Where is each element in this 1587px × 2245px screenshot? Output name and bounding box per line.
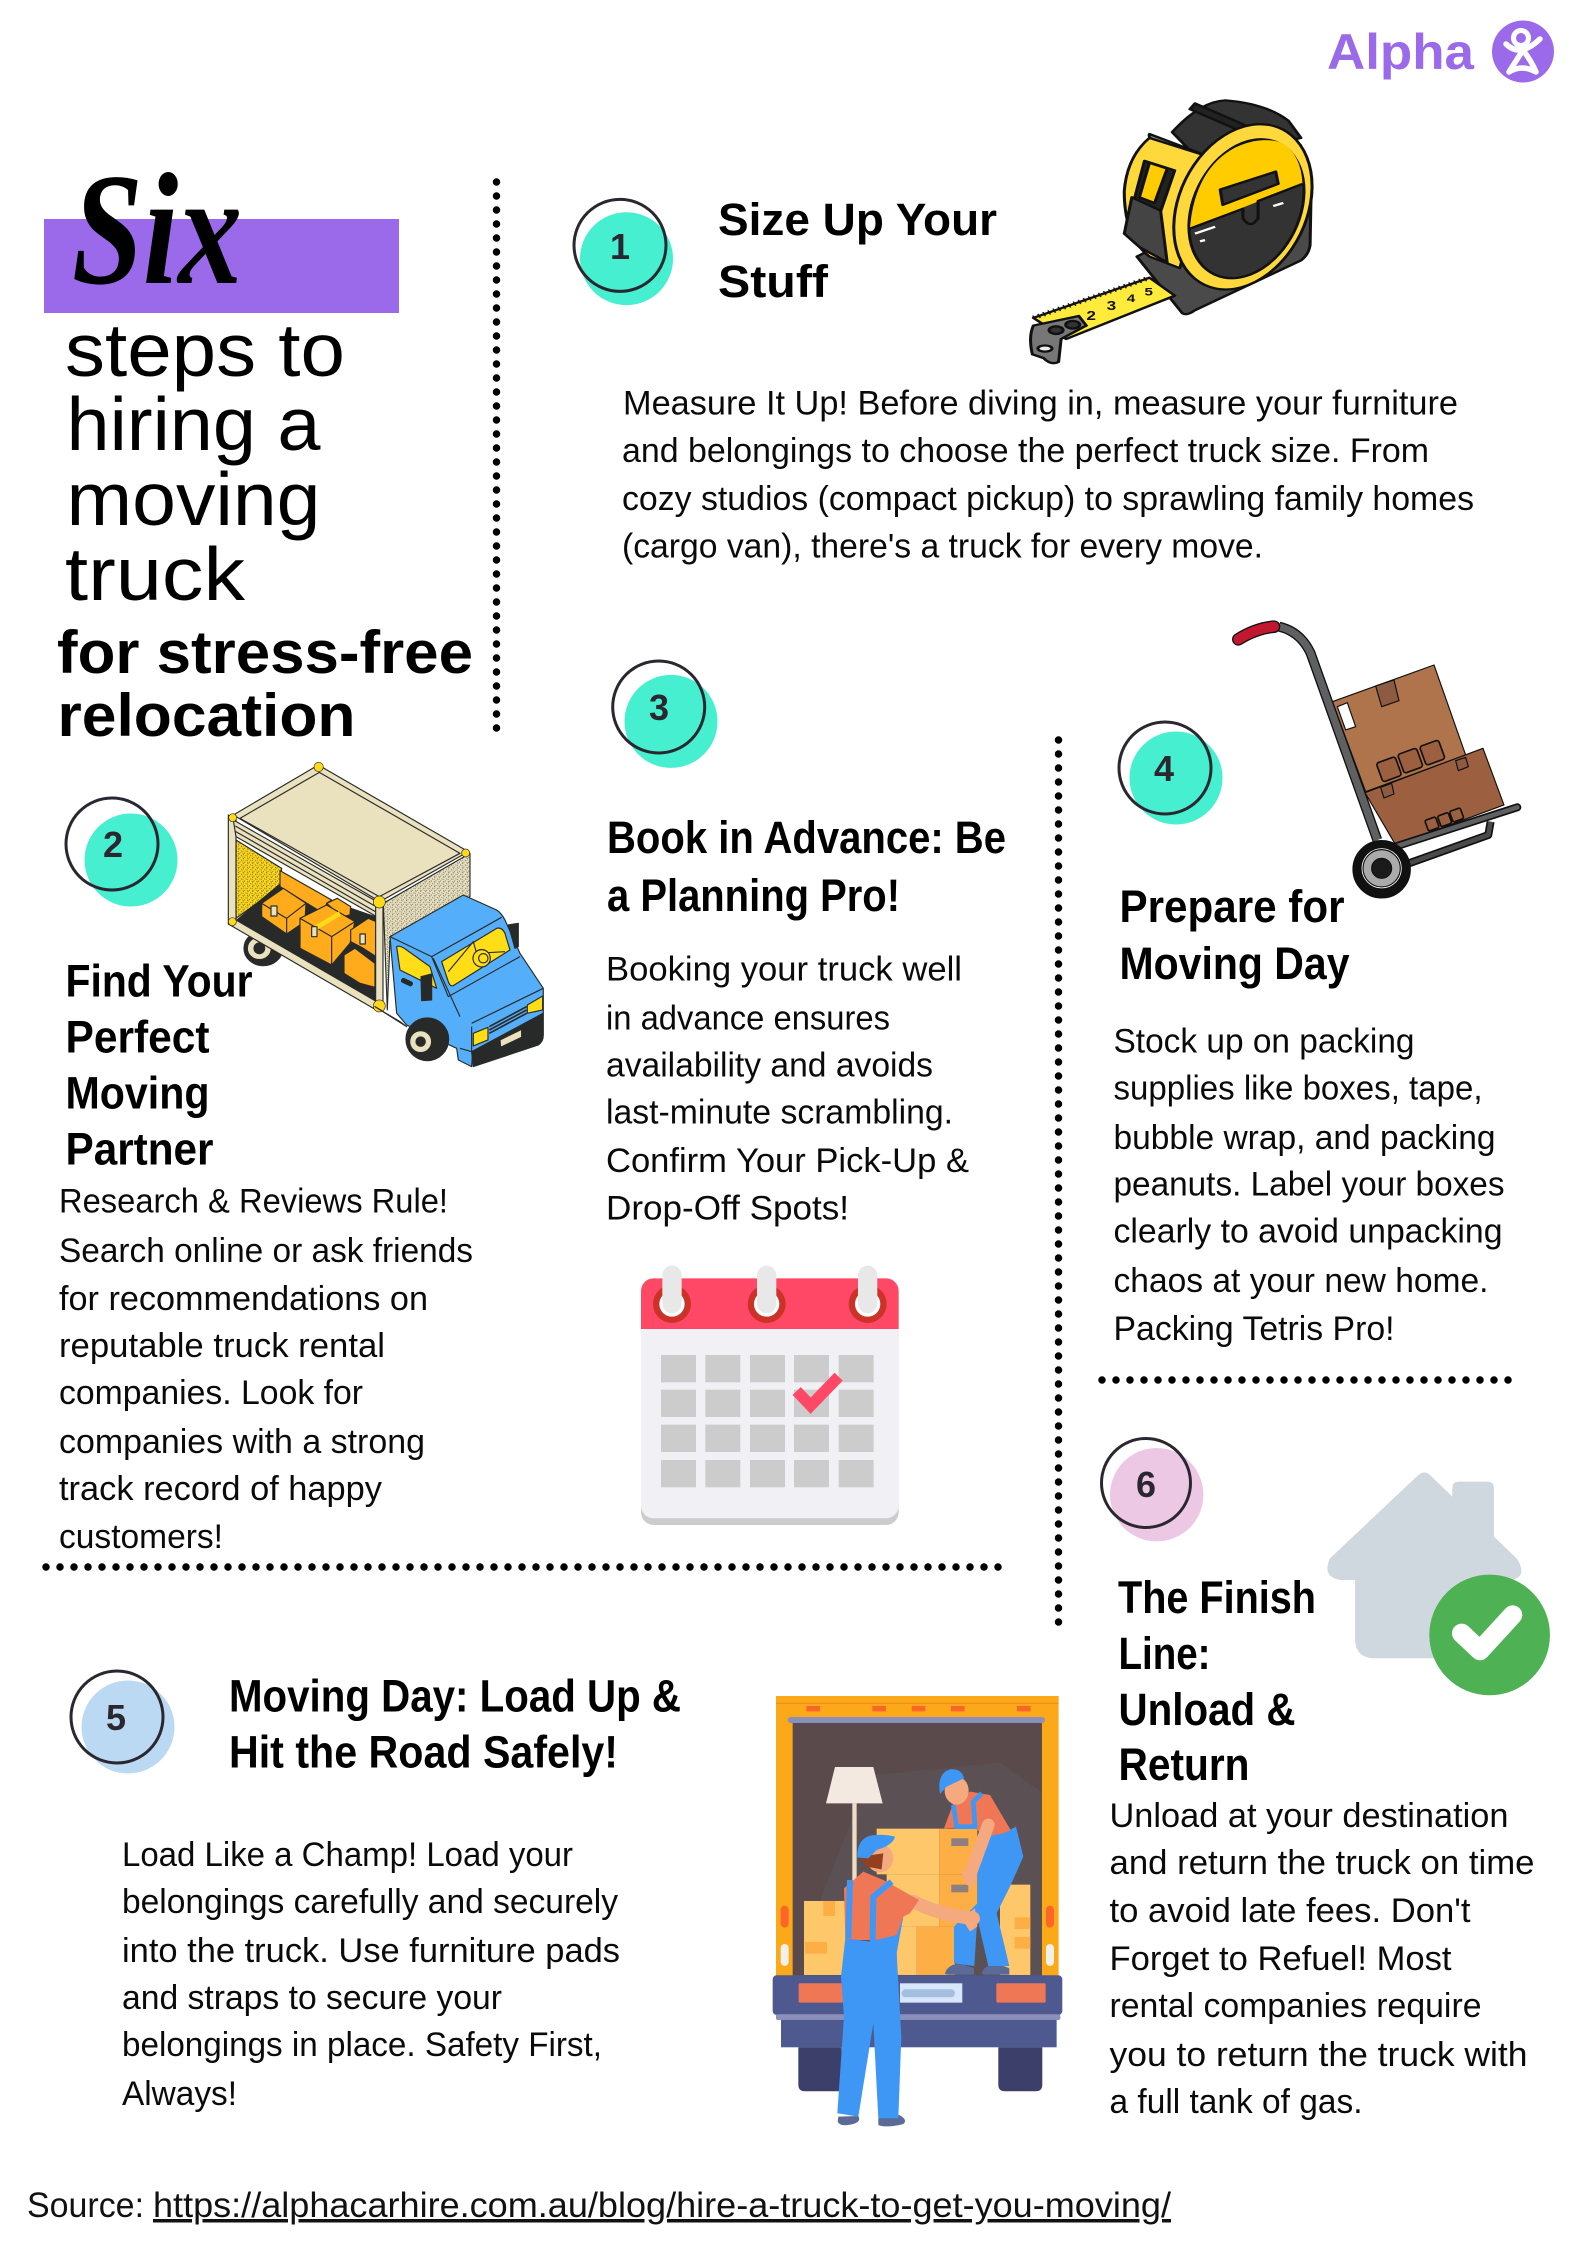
heading 4 [1120,881,1350,989]
illustration: movers loading truck [773,1696,1062,2126]
icon: tape measure: 2 [1086,309,1096,323]
badge 6: 6 [1136,1464,1156,1505]
heading 2: Moving [66,1068,210,1118]
title: steps to hiring a moving truck [65,308,345,616]
heading 2: Find Your [66,956,252,1006]
upper mover [939,1769,1023,1975]
badge 2: 2 [103,824,123,865]
panel: step 2 [59,762,543,1556]
panel: step 5 [71,1670,1062,2126]
title: steps to hiring a moving truck: truck [65,532,246,616]
heading 2 [66,956,252,1174]
body 4: supplies like boxes, tape, [1114,1070,1482,1108]
body 2: track record of happy [59,1470,382,1508]
body 2: for recommendations on [59,1280,428,1318]
badge 5 [71,1671,174,1774]
subtitle [57,619,473,749]
badge 4: 4 [1154,748,1174,789]
heading 1: Size Up Your [718,194,997,245]
body 3: Booking your truck well [606,950,962,988]
body 4: Stock up on packing [1114,1022,1414,1060]
heading 6: Unload & [1118,1684,1296,1735]
title: steps to hiring a moving truck: steps to [65,308,345,392]
body 4: Packing Tetris Pro! [1114,1310,1394,1348]
subtitle: relocation [58,682,355,749]
body 6: Unload at your destination [1110,1797,1508,1835]
body 2: companies with a strong [59,1423,425,1461]
body 5: belongings in place. Safety First, [122,2026,602,2064]
panel: step 3 [606,661,1006,1525]
body 5: Always! [122,2075,237,2113]
heading 6: The Finish [1118,1572,1316,1623]
heading 1 [718,194,997,307]
icon: tape measure: 4 [1127,292,1136,304]
icon: tape measure: 5 [1144,285,1153,298]
body 3: Drop-Off Spots! [606,1190,849,1228]
body 4: clearly to avoid unpacking [1114,1212,1502,1250]
body 1: and belongings to choose the perfect truck size. From [622,432,1429,470]
icon: calendar [641,1266,899,1525]
body 3 [606,950,969,1228]
body 6: a full tank of gas. [1110,2083,1362,2121]
body 2: Research & Reviews Rule! [59,1182,448,1220]
icon: tape measure [1031,100,1334,363]
body 2 [59,1182,473,1556]
heading 3: a Planning Pro! [607,870,900,921]
heading 6: Line: [1118,1628,1210,1679]
body 3: last-minute scrambling. [606,1094,953,1132]
body 2: Search online or ask friends [59,1232,473,1270]
badge 3: 3 [649,687,669,728]
heading 3: Book in Advance: Be [607,812,1006,863]
heading 6 [1118,1572,1316,1790]
title: Six: Six [72,140,242,318]
body 3: Confirm Your Pick-Up & [606,1142,969,1180]
body 1: Measure It Up! Before diving in, measure your furniture [623,384,1458,422]
icon: tape measure: 3 [1107,299,1116,314]
body 5: and straps to secure your [122,1979,502,2017]
title highlight [44,219,399,313]
badge 5: 5 [106,1697,126,1738]
body 3: in advance ensures [606,1000,890,1038]
body 6 [1110,1797,1534,2121]
body 6: Forget to Refuel! Most [1110,1940,1452,1978]
logo: Alpha: Alpha [1327,24,1475,80]
heading 5 [229,1670,681,1778]
panel: title [44,140,473,749]
source line: https://alphacarhire.com.au/blog/hire-a-truck-to-get-you-moving/ [153,2186,1171,2225]
heading 3 [607,812,1006,921]
body 4: peanuts. Label your boxes [1114,1166,1504,1204]
badge 6 [1102,1438,1203,1541]
heading 4: Prepare for [1120,881,1344,932]
heading 1: Stuff [718,256,829,307]
body 5 [122,1836,620,2113]
heading 5: Moving Day: Load Up & [229,1670,681,1722]
panel: step 4 [1114,627,1517,1348]
lower mover [837,1835,977,2126]
heading 6: Return [1118,1739,1250,1790]
body 4 [1114,1022,1504,1348]
source line: Source: [27,2186,144,2225]
heading 4: Moving Day [1120,938,1350,989]
icon: hand truck [1238,627,1517,898]
body 1 [622,384,1474,566]
title: steps to hiring a moving truck: hiring a [66,382,321,466]
body 1: (cargo van), there's a truck for every move. [622,528,1263,566]
body 1: cozy studios (compact pickup) to sprawling family homes [622,480,1474,518]
body 6: you to return the truck with [1110,2036,1528,2074]
badge 3 [613,661,718,768]
body 6: rental companies require [1110,1987,1482,2025]
panel: step 1 [574,100,1474,565]
icon: house with check [1327,1472,1550,1695]
heading 2: Partner [66,1124,214,1174]
icon: moving truck [228,762,543,1067]
subtitle: for stress-free [57,619,473,686]
body 6: to avoid late fees. Don't [1110,1892,1471,1930]
logo: Alpha [1327,20,1554,82]
body 4: chaos at your new home. [1114,1262,1488,1300]
body 2: customers! [59,1518,223,1556]
badge 4 [1119,722,1222,824]
body 5: into the truck. Use furniture pads [122,1932,620,1970]
body 2: companies. Look for [59,1374,363,1412]
body 2: reputable truck rental [59,1327,385,1365]
heading 2: Perfect [66,1012,210,1062]
body 4: bubble wrap, and packing [1114,1119,1496,1157]
title: steps to hiring a moving truck: moving [66,457,320,541]
panel: step 6 [1102,1438,1550,2121]
badge 1: 1 [610,226,630,267]
heading 5: Hit the Road Safely! [229,1726,618,1778]
body 3: availability and avoids [606,1046,933,1084]
body 5: Load Like a Champ! Load your [122,1836,573,1874]
body 5: belongings carefully and securely [122,1883,618,1921]
body 6: and return the truck on time [1110,1844,1534,1882]
badge 1 [574,199,673,305]
badge 2 [66,798,178,906]
